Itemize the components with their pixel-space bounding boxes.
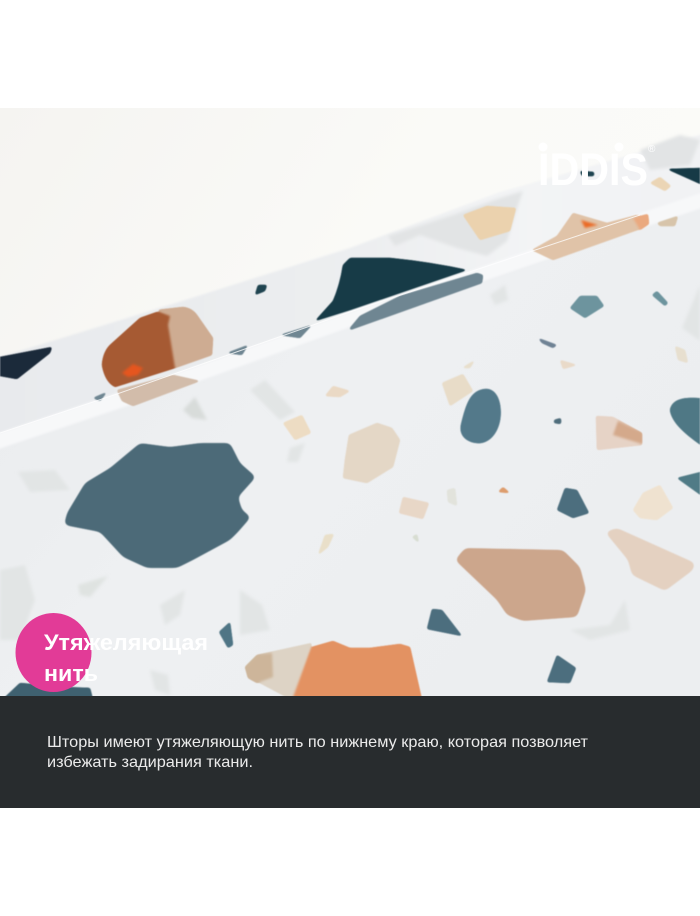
description text: Шторы имеют утяжеляющую нить по нижнему краю, которая позволяет (47, 734, 589, 751)
hem seam stripes (93, 273, 483, 401)
lower curtain fabric (0, 195, 700, 700)
heading: нить (44, 661, 98, 686)
terrazzo: small dark stone (255, 285, 267, 295)
terrazzo: beige and orange bottom stone (245, 641, 422, 700)
brand logo: ® (648, 144, 656, 155)
terrazzo: large blue-grey stone (64, 443, 256, 568)
terrazzo: small stones (219, 291, 700, 683)
terrazzo: brown and tan stone (102, 307, 213, 406)
wall background (0, 108, 454, 356)
hem fold highlight (0, 300, 388, 448)
seam thread (0, 215, 640, 433)
hem pale shapes (388, 135, 700, 256)
product photo: curtain fabric with terrazzo print (0, 108, 700, 700)
hem band (0, 132, 700, 450)
description panel (0, 696, 700, 808)
description text (47, 734, 589, 771)
terrazzo: long pale tan stone (605, 528, 695, 591)
pink heading circle (16, 613, 92, 692)
heading (44, 630, 208, 686)
terrazzo: navy stone left (0, 347, 52, 379)
terrazzo: bottom-left dark stone (4, 682, 94, 696)
terrazzo: big dark teal stone (315, 258, 467, 321)
brand logo: IDDIS (538, 144, 648, 195)
description text: избежать задирания ткани. (47, 754, 253, 771)
terrazzo: hem tan and orange stones (463, 168, 700, 260)
heading: Утяжеляющая (44, 630, 208, 655)
faint show-through shapes (0, 285, 700, 695)
infographic canvas (0, 108, 700, 808)
terrazzo: large tan stone (455, 548, 586, 621)
